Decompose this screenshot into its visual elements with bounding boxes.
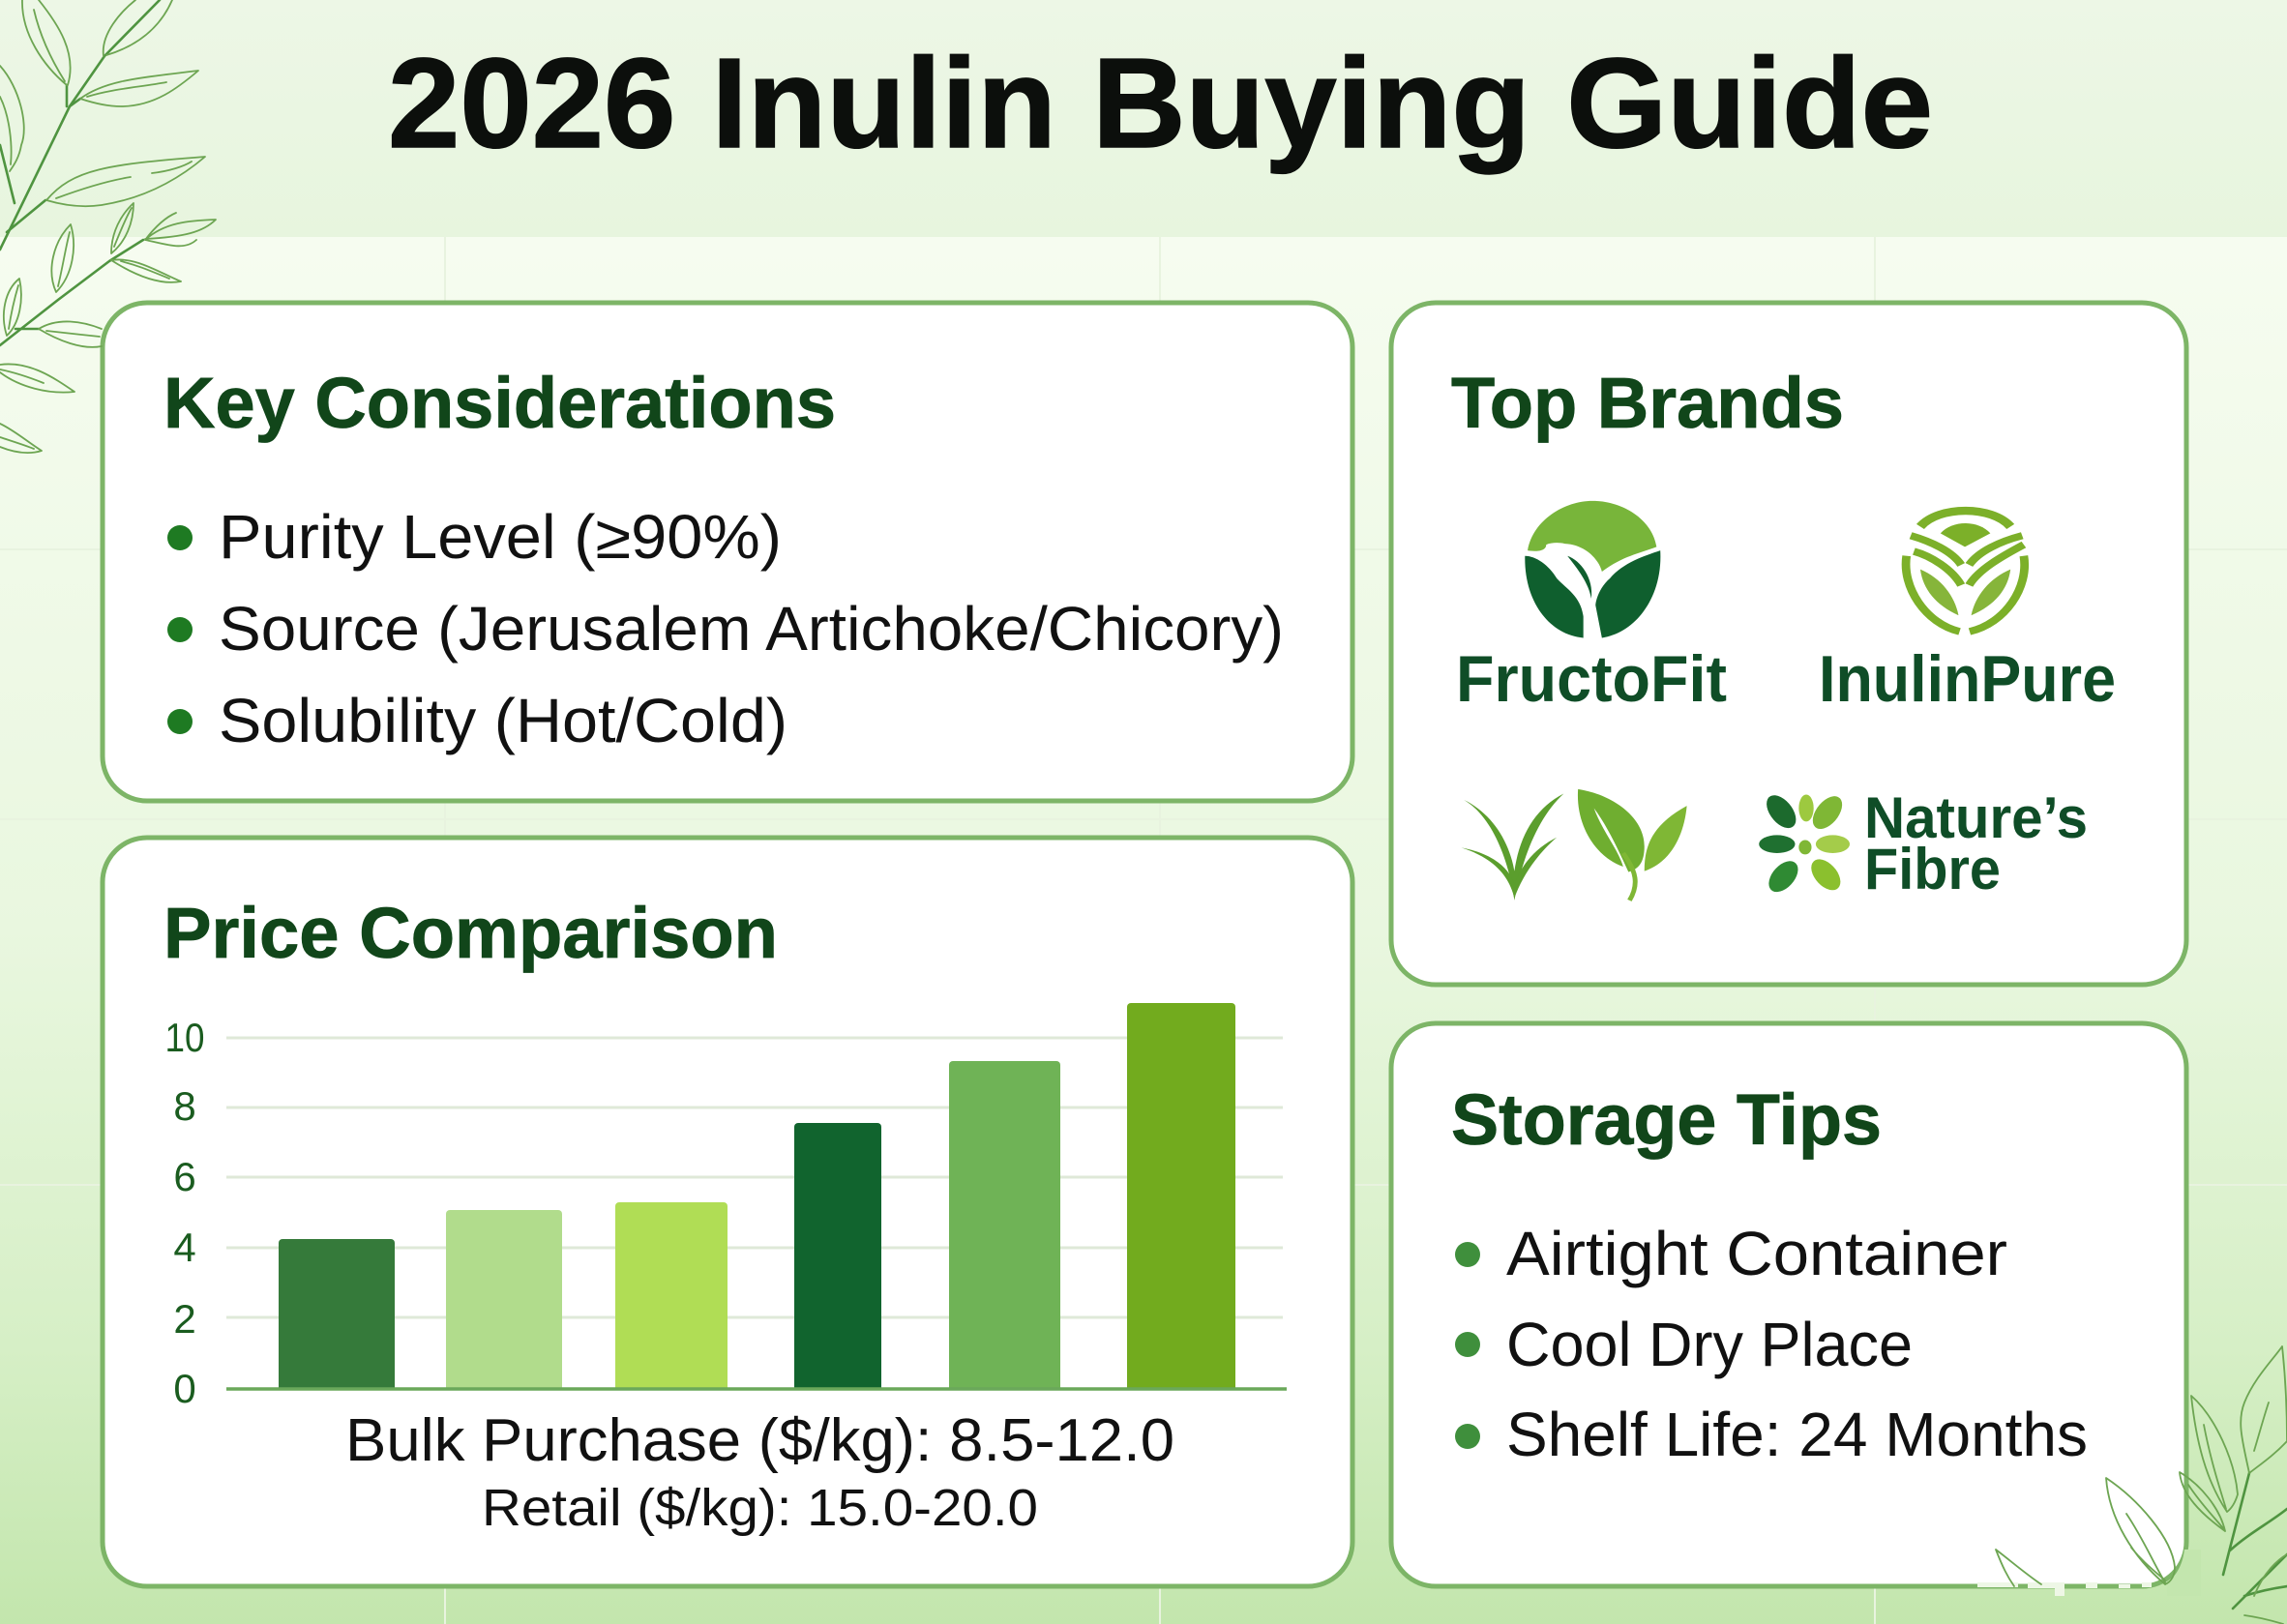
decoration: leaves top-left [0, 0, 216, 453]
heading: price comparison: Price Comparison [163, 893, 778, 973]
logo: InulinPure [1819, 511, 2116, 716]
heading: key considerations: Key Considerations [163, 363, 836, 443]
panel: price comparison [103, 838, 1352, 1586]
bar chart: 4 [173, 1225, 196, 1270]
list: storage tips: Shelf Life: 24 Months [1506, 1400, 2088, 1469]
list: key considerations [167, 502, 1284, 755]
panel: key considerations [103, 303, 1352, 801]
heading: top brands: Top Brands [1451, 363, 1844, 443]
logo: sprouts and leaves [1462, 789, 1687, 901]
bar chart [164, 1003, 1287, 1411]
list: storage tips: Cool Dry Place [1506, 1310, 1913, 1379]
bar chart: 8 [173, 1083, 196, 1129]
logo: Nature's Fibre: Fibre [1864, 837, 2001, 901]
bar chart: 6 [173, 1154, 196, 1199]
bar chart: 2 [173, 1296, 196, 1342]
logo: FructoFit [1456, 501, 1727, 716]
bar chart: 0 [173, 1366, 196, 1411]
list: storage tips: Airtight Container [1506, 1219, 2007, 1288]
logo: FructoFit: FructoFit [1456, 642, 1727, 716]
list: storage tips [1455, 1219, 2088, 1469]
list: key considerations: Source (Jerusalem Artichoke/Chicory) [219, 594, 1284, 664]
list: key considerations: Solubility (Hot/Cold) [219, 686, 787, 755]
panel: top brands [1391, 303, 2186, 985]
logo: Nature's Fibre: Nature’s [1864, 785, 2088, 850]
logo: InulinPure: InulinPure [1819, 642, 2116, 716]
decoration: leaves bottom-right [1977, 1346, 2287, 1624]
title: 2026 Inulin Buying Guide [388, 32, 1933, 174]
list: key considerations: Purity Level (≥90%) [219, 502, 782, 572]
logo: Nature's Fibre [1759, 785, 2088, 901]
bar chart: 10 [164, 1015, 205, 1060]
caption: bulk price: Bulk Purchase ($/kg): 8.5-12.0 [345, 1407, 1174, 1474]
heading: storage tips: Storage Tips [1451, 1079, 1882, 1160]
caption: retail price: Retail ($/kg): 15.0-20.0 [482, 1479, 1038, 1537]
panel: storage tips [1391, 1023, 2186, 1586]
